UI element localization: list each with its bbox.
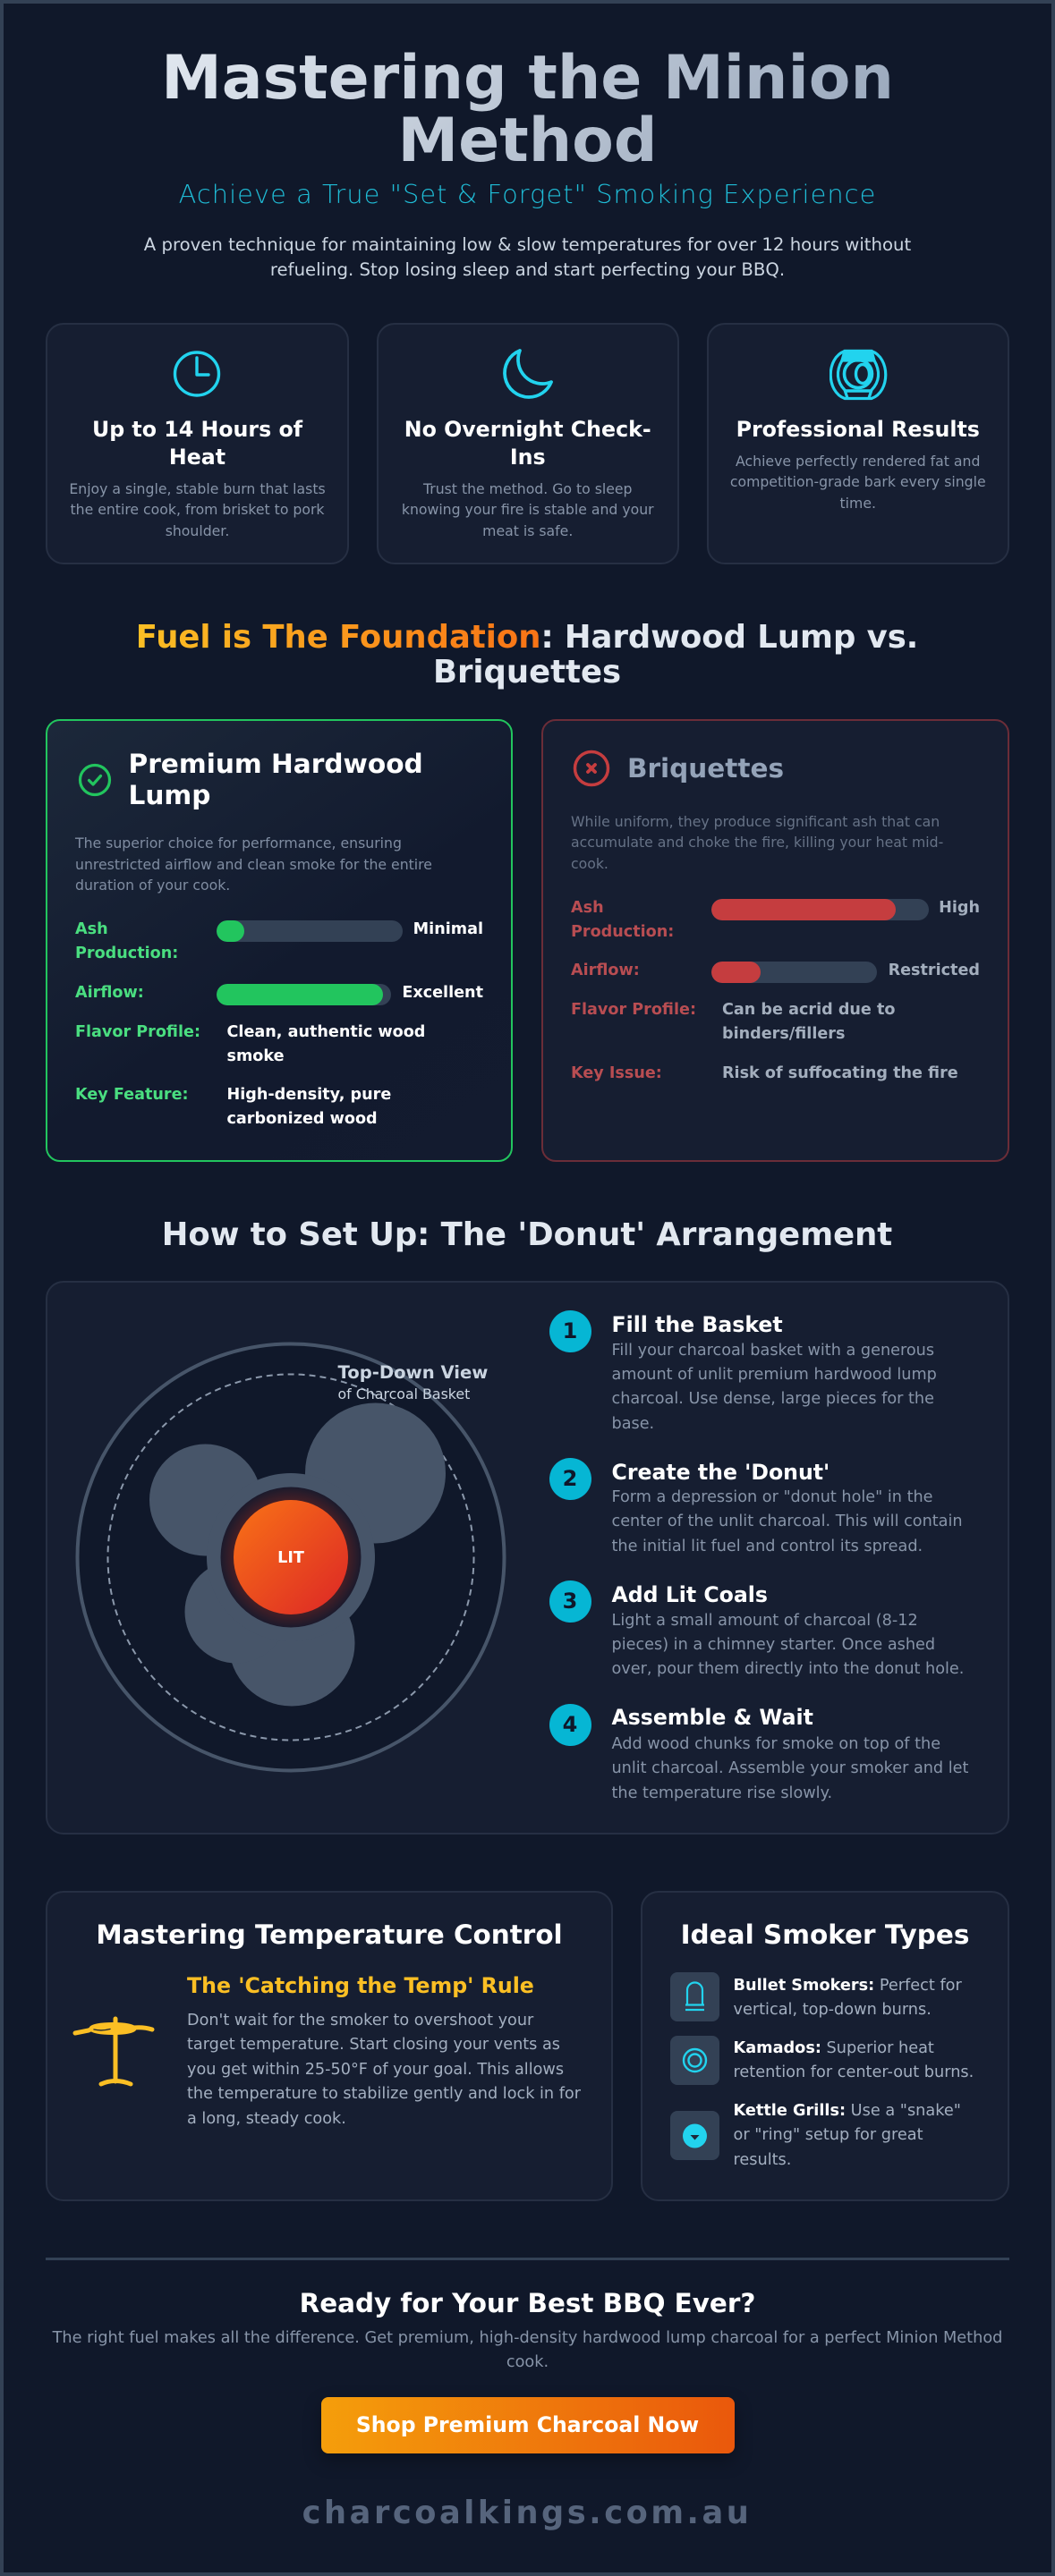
row: key issue: Key Issue:: [571, 1064, 662, 1082]
row: key feature: carbonized wood: [227, 1110, 378, 1128]
description: [730, 453, 986, 512]
rule text: you get within 25-50°F of your goal. This allows: [187, 2061, 564, 2079]
panel: benefit results: [707, 323, 1009, 564]
text: kettle grills: results.: [734, 2151, 791, 2169]
heading: fuel comparison: Fuel is The Foundation: Hardwood Lump vs.: [136, 619, 918, 656]
step 3: 3: [563, 1589, 577, 1614]
title: Mastering the Minion: [161, 43, 894, 113]
rule text: [187, 2011, 581, 2127]
icon: smoker badge: [830, 349, 888, 401]
text: kamados: retention for center-out burns.: [734, 2063, 974, 2081]
row: key feature: High-density, pure: [227, 1086, 391, 1104]
label: top-down view: Top-Down View: [338, 1362, 488, 1383]
panel: ideal smoker types: [641, 1891, 1009, 2201]
rule text: Don't wait for the smoker to overshoot your: [187, 2011, 533, 2029]
row: key feature: Key Feature:: [75, 1086, 189, 1104]
panel: donut arrangement: [46, 1281, 1009, 1835]
rule text: target temperature. Start closing your vents as: [187, 2036, 560, 2054]
text: bullet smokers: Bullet Smokers: Perfect for: [734, 1977, 962, 1995]
step 1: 1: [563, 1318, 577, 1343]
heading: donut setup: How to Set Up: The 'Donut' Arrangement: [162, 1216, 892, 1253]
heading: Heat: [169, 445, 225, 470]
heading: Up to 14 Hours of: [92, 417, 302, 442]
description: premium: duration of your cook.: [75, 877, 230, 894]
subtitle: Achieve a True "Set & Forget" Smoking Experience: [179, 179, 876, 209]
row: airflow: Restricted: [889, 962, 980, 979]
step 1: base.: [612, 1415, 654, 1433]
step 3: pieces) in a chimney starter. Once ashed: [612, 1636, 935, 1654]
heading: [404, 417, 651, 470]
cta heading: Ready for Your Best BBQ Ever?: [300, 2288, 755, 2318]
step 4: Add wood chunks for smoke on top of the: [612, 1735, 940, 1753]
step 4: 4: [563, 1712, 577, 1737]
description: time.: [840, 495, 876, 512]
description: shoulder.: [166, 522, 229, 539]
description: [69, 479, 326, 539]
description: Achieve perfectly rendered fat and: [736, 453, 980, 469]
step 4: Assemble & Wait: [612, 1705, 813, 1730]
rule text: the temperature to stabilize gently and lock in for: [187, 2085, 581, 2103]
cta button: [320, 2397, 734, 2453]
heading: Ideal Smoker Types: [681, 1919, 969, 1950]
panel: temperature control: [46, 1891, 613, 2201]
step 2: 2: [563, 1465, 577, 1490]
intro text: A proven technique for maintaining low & slow temperatures for over 12 hours without: [144, 234, 911, 254]
description: briquettes: [571, 812, 943, 872]
description: premium: [75, 835, 432, 894]
heading: No Overnight Check-: [404, 417, 651, 442]
cta text: cook.: [506, 2353, 549, 2371]
row: ash production: Minimal: [413, 920, 483, 938]
row: airflow: [75, 984, 483, 1005]
icon: kamado: [670, 2036, 719, 2085]
step 2: Form a depression or "donut hole" in the: [612, 1488, 933, 1506]
rule text: a long, steady cook.: [187, 2109, 346, 2127]
icon: moon: [503, 349, 553, 399]
text: kettle grills: Kettle Grills: Use a "snake": [734, 2102, 961, 2120]
description: Trust the method. Go to sleep: [423, 479, 633, 497]
heading: fuel comparison: [136, 619, 918, 691]
icon: check: [79, 764, 111, 796]
step 1: Fill your charcoal basket with a generous: [612, 1342, 934, 1360]
title: Method: [397, 106, 658, 175]
description: premium: unrestricted airflow and clean smoke for the entire: [75, 856, 432, 873]
cta text: The right fuel makes all the difference. Get premium, high-density hardwood lump charcoal for a perfect Minion Method: [53, 2329, 1002, 2347]
heading: premium: Lump: [129, 780, 210, 810]
row: flavor profile: Flavor Profile:: [75, 1023, 200, 1041]
row: key feature: [75, 1086, 391, 1128]
panel: premium hardwood: [46, 719, 513, 1162]
label: top-down view: [338, 1362, 488, 1402]
row: airflow: [571, 962, 980, 983]
step 3: over, pour them directly into the donut hole.: [612, 1660, 964, 1678]
description: premium: The superior choice for performance, ensuring: [75, 835, 402, 852]
row: ash production: Ash: [571, 899, 604, 917]
step 2: Create the 'Donut': [612, 1460, 830, 1485]
text: kettle grills: or "ring" setup for great: [734, 2126, 923, 2144]
text: kamados: [734, 2039, 974, 2081]
step 1: [549, 1310, 937, 1433]
step 1: charcoal. Use dense, large pieces for the: [612, 1390, 934, 1408]
text: kamados: Kamados: Superior heat: [734, 2039, 934, 2057]
icon: bullet smoker: [670, 1972, 719, 2021]
heading: [92, 417, 302, 470]
step 2: center of the unlit charcoal. This will contain: [612, 1513, 963, 1530]
row: airflow: Airflow:: [571, 962, 640, 979]
row: ash production: Ash: [75, 920, 108, 938]
intro text: refueling. Stop losing sleep and start perfecting your BBQ.: [270, 259, 785, 279]
row: key issue: Risk of suffocating the fire: [722, 1064, 958, 1082]
title: [150, 47, 905, 172]
row: ash production: Production:: [571, 923, 674, 941]
description: meat is safe.: [482, 522, 573, 539]
footer brand: charcoalkings.com.au: [302, 2495, 752, 2531]
row: flavor profile: binders/fillers: [722, 1025, 845, 1043]
step 3: [549, 1580, 964, 1678]
diagram: top-down donut: LIT: [277, 1549, 304, 1567]
description: Enjoy a single, stable burn that lasts: [69, 479, 326, 497]
step 2: [549, 1458, 963, 1555]
description: knowing your fire is stable and your: [402, 501, 654, 518]
text: bullet smokers: [734, 1977, 962, 2019]
row: flavor profile: Can be acrid due to: [722, 1001, 895, 1019]
row: flavor profile: Flavor Profile:: [571, 1001, 696, 1019]
row: ash production: Production:: [75, 945, 178, 962]
description: briquettes: While uniform, they produce significant ash that can: [571, 812, 940, 830]
description: [402, 479, 654, 539]
heading: fuel comparison: Briquettes: [433, 654, 621, 691]
icon: vent damper: [73, 2016, 154, 2086]
cta button: Shop Premium Charcoal Now: [356, 2411, 699, 2436]
row: ash production: [571, 899, 980, 941]
divider: [46, 2258, 1009, 2260]
step 4: the temperature rise slowly.: [612, 1784, 832, 1802]
label: top-down view: of Charcoal Basket: [338, 1385, 470, 1402]
step 3: Light a small amount of charcoal (8-12: [612, 1612, 918, 1630]
heading: Ins: [510, 445, 546, 470]
row: ash production: High: [939, 899, 980, 917]
description: briquettes: accumulate and choke the fire, killing your heat mid-: [571, 834, 943, 851]
panel: benefit hours: [46, 323, 349, 564]
panel: briquettes: [541, 719, 1009, 1162]
step 1: amount of unlit premium hardwood lump: [612, 1366, 937, 1384]
row: flavor profile: Clean, authentic wood: [227, 1023, 425, 1041]
icon: cross: [573, 750, 610, 787]
step 4: [549, 1704, 968, 1802]
icon: kettle grill: [670, 2111, 719, 2160]
row: flavor profile: [571, 1001, 895, 1043]
row: airflow: Airflow:: [75, 984, 144, 1002]
row: airflow: Excellent: [402, 984, 483, 1002]
description: briquettes: cook.: [571, 855, 608, 872]
panel: benefit overnight: [376, 323, 679, 564]
step 4: unlit charcoal. Assemble your smoker and let: [612, 1759, 968, 1777]
description: the entire cook, from brisket to pork: [70, 501, 325, 518]
row: ash production: [75, 920, 483, 962]
step 1: Fill the Basket: [612, 1311, 783, 1336]
heading: premium: [129, 748, 423, 810]
rule heading: The 'Catching the Temp' Rule: [187, 1973, 534, 1998]
heading: Professional Results: [736, 417, 980, 442]
row: key issue: [571, 1064, 958, 1082]
heading: premium: Premium Hardwood: [129, 748, 423, 778]
intro text: [144, 234, 911, 279]
cta text: [52, 2329, 1002, 2371]
step 2: the initial lit fuel and control its spread.: [612, 1538, 923, 1555]
heading: Mastering Temperature Control: [96, 1919, 563, 1950]
text: kettle grills: [734, 2102, 961, 2169]
step 3: Add Lit Coals: [612, 1581, 768, 1606]
diagram: top-down donut: [75, 1342, 506, 1773]
row: flavor profile: smoke: [227, 1047, 285, 1065]
description: competition-grade bark every single: [730, 473, 986, 490]
icon: clock: [174, 351, 220, 397]
heading: briquettes: Briquettes: [627, 753, 784, 784]
row: flavor profile: [75, 1023, 425, 1065]
text: bullet smokers: vertical, top-down burns.: [734, 2001, 932, 2019]
